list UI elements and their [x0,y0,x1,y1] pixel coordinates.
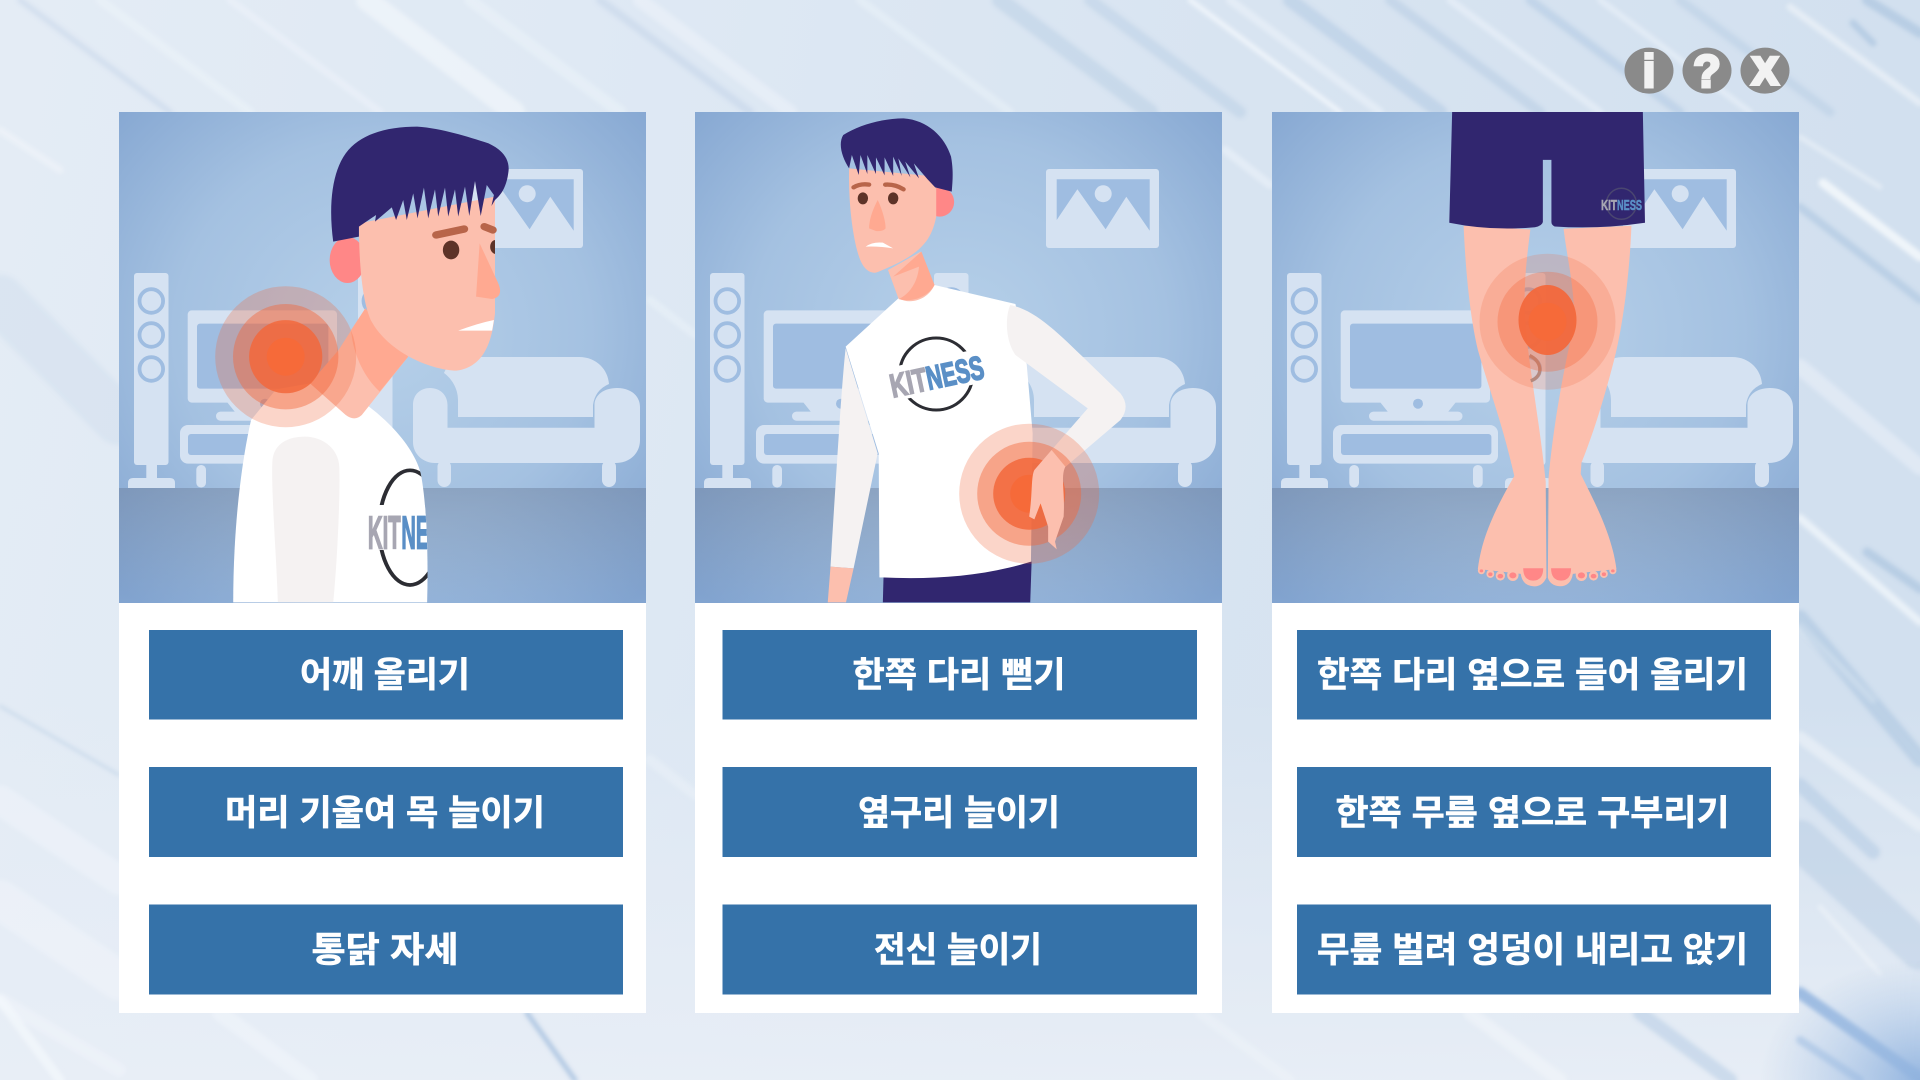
button: 통닭 자세: 통닭 자세 [312,931,458,970]
pain rings: waist [959,424,1099,564]
panel: waist stretches [695,112,1222,1013]
icon: close: X [1752,51,1778,93]
button: 한쪽 무릎 옆으로 구부리기: 한쪽 무릎 옆으로 구부리기 [1336,794,1730,833]
panel background [695,112,1222,1013]
button: 한쪽 다리 옆으로 들어 올리기: 한쪽 다리 옆으로 들어 올리기 [1317,656,1748,695]
pain rings: shoulder [215,286,356,427]
button: 옆구리 늘이기 [722,767,1197,857]
hand [1029,450,1065,549]
shorts logo: KIT [1601,197,1617,214]
icon: close [1740,48,1790,94]
panel: shoulder and neck stretches [119,112,646,1013]
button: 머리 기울여 목 늘이기 [149,767,623,857]
scene: man front view with waist pain [695,112,1222,603]
icon: info [1624,45,1674,97]
icon: help: ? [1693,46,1721,97]
t-shirt logo: KIT [887,361,930,404]
button: 무릎 벌려 엉덩이 내리고 앉기 [1297,904,1771,994]
button: 무릎 벌려 엉덩이 내리고 앉기: 무릎 벌려 엉덩이 내리고 앉기 [1317,931,1748,970]
arm on hip [1007,305,1126,468]
button: 전신 늘이기: 전신 늘이기 [874,931,1042,970]
button: 한쪽 다리 뻗기: 한쪽 다리 뻗기 [852,656,1066,695]
button: 어깨 올리기: 어깨 올리기 [300,656,470,695]
button: 통닭 자세 [149,904,623,994]
pain rings: knee [1480,254,1616,390]
panel background [1272,112,1799,1013]
t-shirt logo [888,351,984,399]
scene: man side view with shoulder pain: KIT [368,507,401,559]
icon: help [1682,46,1732,97]
button: 어깨 올리기 [149,630,623,720]
button: 한쪽 다리 뻗기 [722,630,1197,720]
button: 한쪽 무릎 옆으로 구부리기 [1297,767,1771,857]
button: 한쪽 다리 옆으로 들어 올리기 [1297,630,1771,720]
shorts logo [1601,188,1642,219]
scene: man side view with shoulder pain: NE [401,507,429,559]
t-shirt logo: NESS [923,349,987,397]
shorts logo: NESS [1617,197,1642,214]
scene: man side view with shoulder pain [119,112,646,603]
button: 옆구리 늘이기: 옆구리 늘이기 [858,794,1060,833]
scene: legs with knee pain [1272,112,1799,603]
panel: knee stretches [1272,112,1799,1013]
icon: info: i [1643,45,1655,97]
panel background [119,112,646,1013]
button: 전신 늘이기 [722,904,1197,994]
button: 머리 기울여 목 늘이기: 머리 기울여 목 늘이기 [225,794,545,833]
